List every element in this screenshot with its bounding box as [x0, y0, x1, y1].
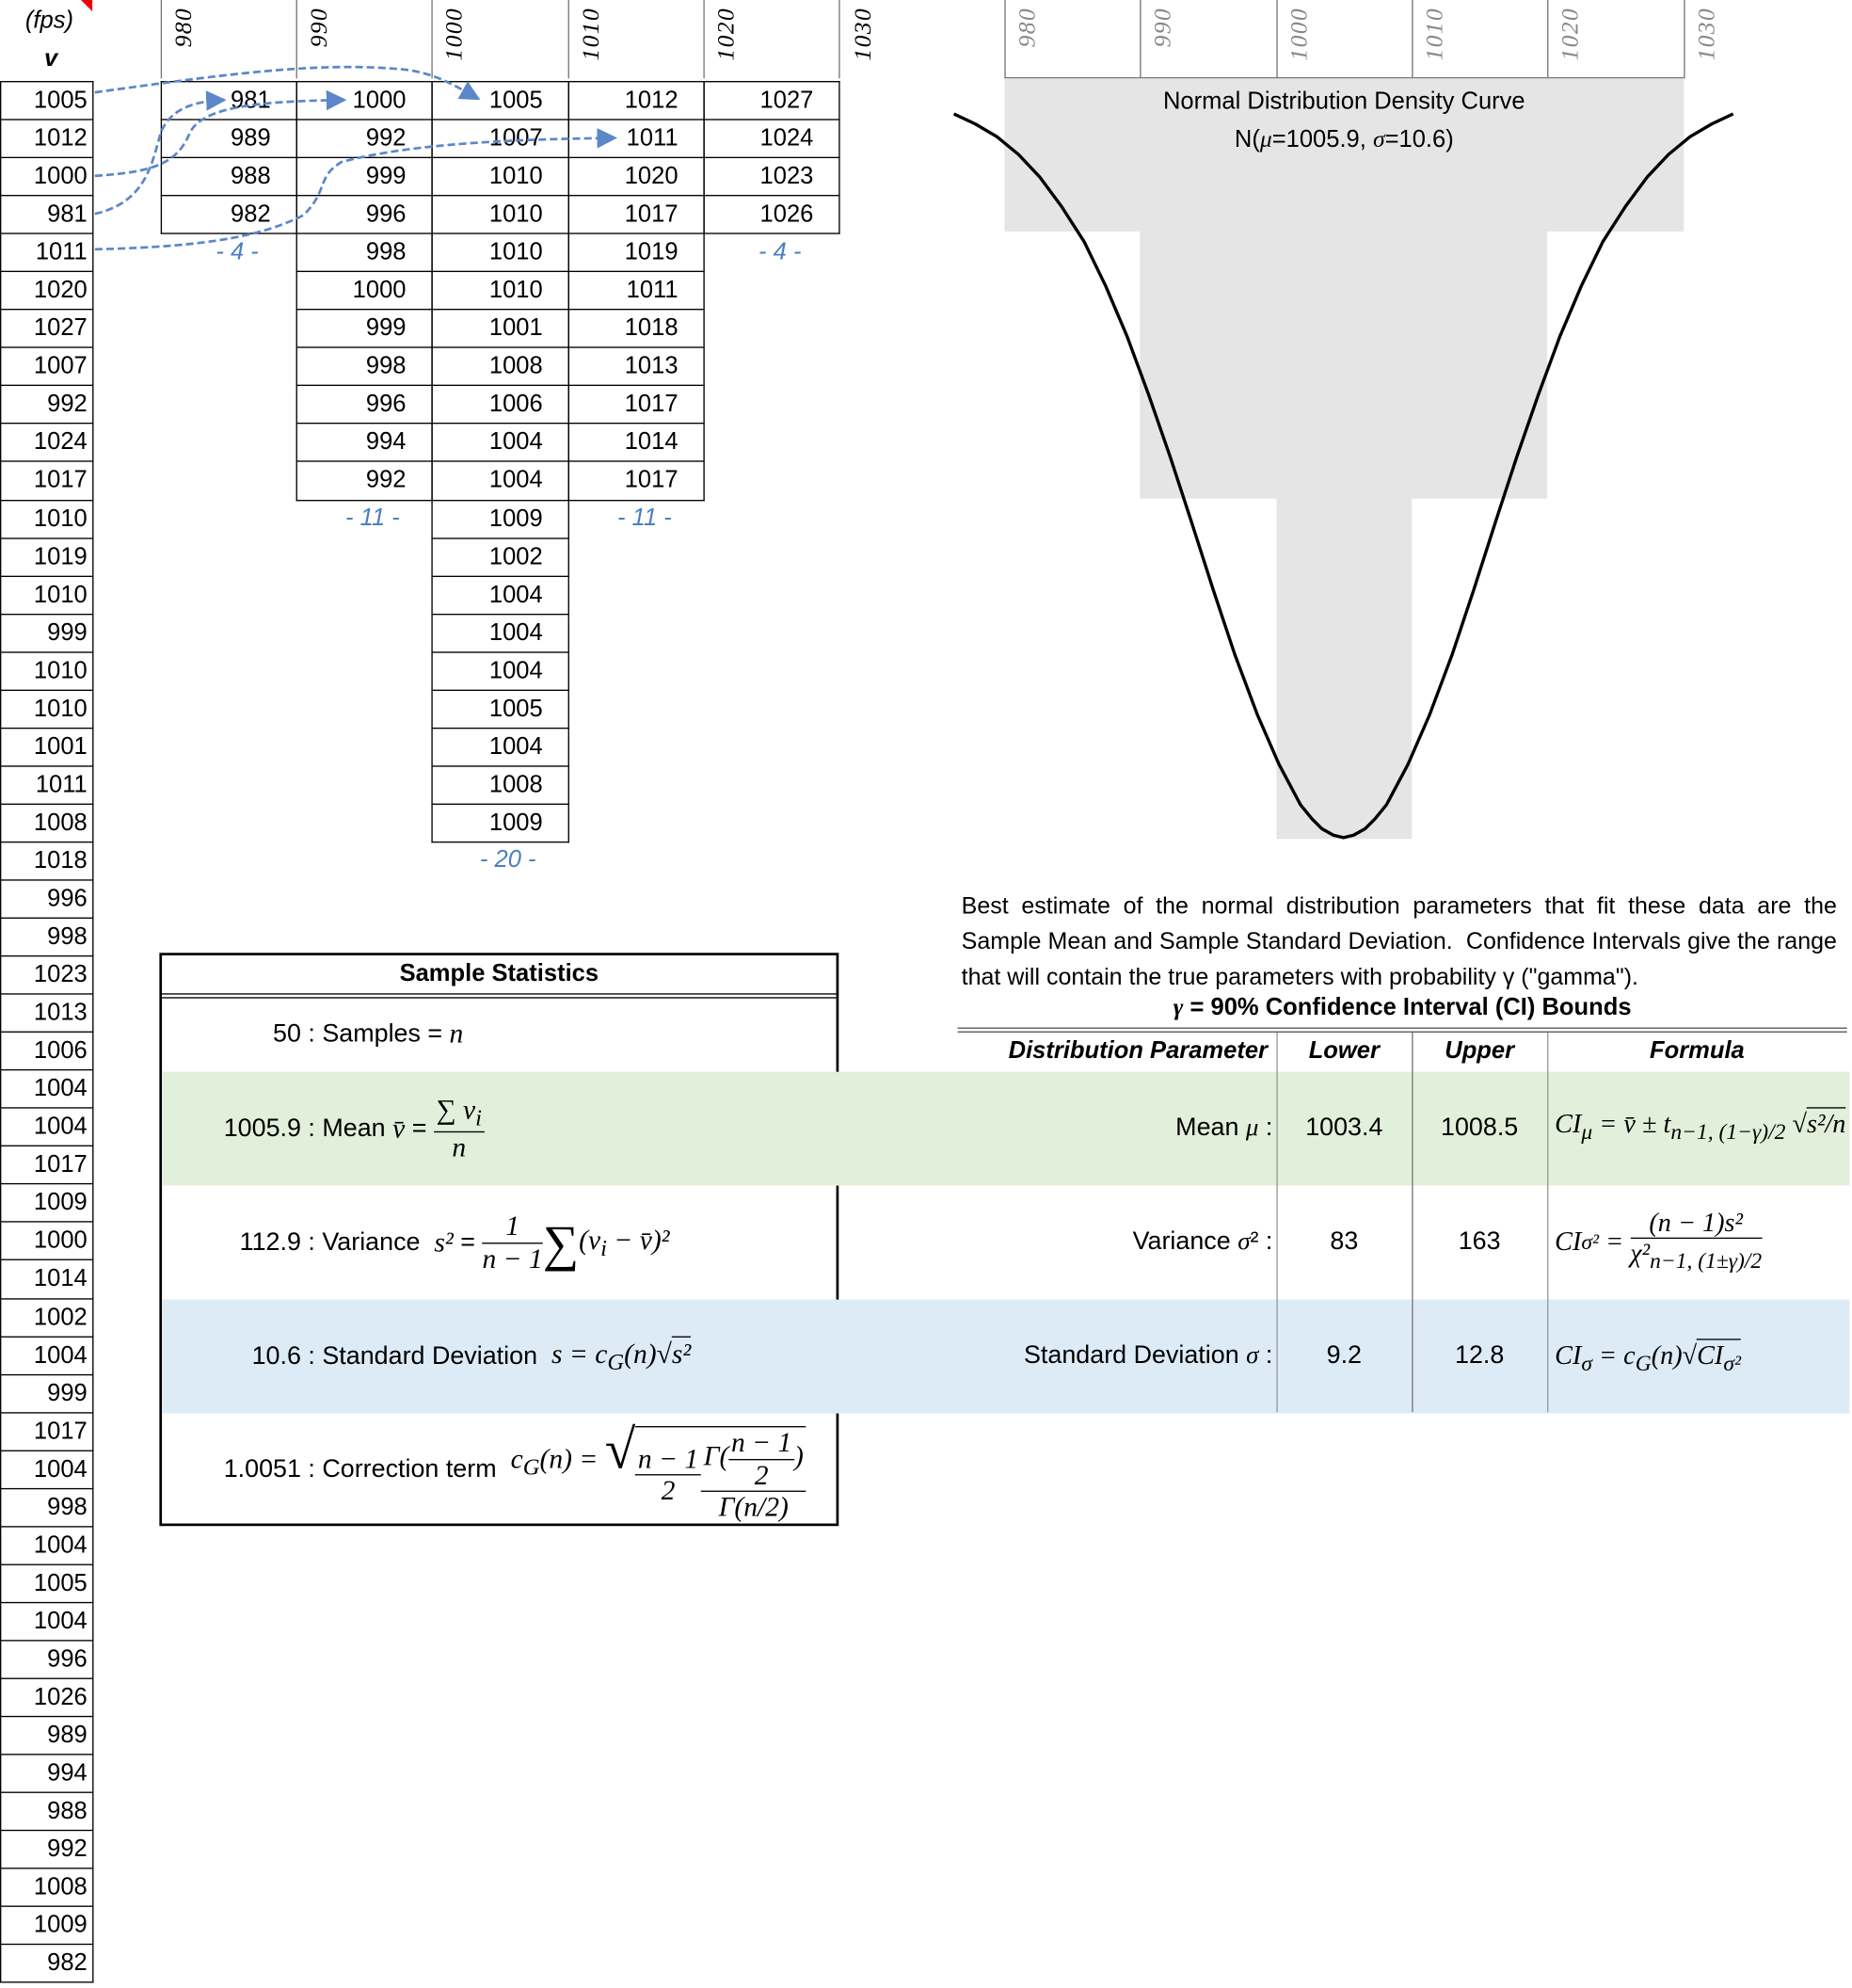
bin 990 column: 999 — [366, 315, 407, 342]
bin 1020 column: 1026 — [760, 201, 813, 228]
row: variance: s² — [434, 1226, 454, 1258]
v data column: 994 — [47, 1760, 88, 1787]
v data column: 992 — [47, 1836, 88, 1863]
count 1010: - 11 - — [617, 505, 672, 532]
heading: confidence interval bounds: γ = 90% Confidence Interval (CI) Bounds — [1173, 995, 1632, 1021]
v data column: 1004 — [34, 1114, 88, 1141]
dashed arrows — [94, 66, 617, 250]
header row — [1009, 1037, 1745, 1065]
row: variance: ∑ — [543, 1214, 579, 1271]
left histogram column headers: 1000 — [441, 8, 468, 61]
v data column: 981 — [47, 201, 88, 228]
right chart column headers: 1030 — [1694, 8, 1720, 61]
bin 1000 column: 1008 — [489, 354, 543, 380]
row: variance: 1 — [505, 1210, 519, 1242]
v data column: 989 — [47, 1723, 88, 1749]
header: v column: (fps) — [25, 8, 73, 34]
row: variance CI: σ² — [1581, 1228, 1599, 1254]
row: samples: 50 — [273, 1019, 301, 1047]
v data column: 1011 — [36, 772, 88, 798]
row: samples: : Samples = — [308, 1019, 442, 1047]
header row: Lower — [1309, 1037, 1380, 1065]
v data column: 1009 — [34, 1913, 88, 1939]
row: variance CI: χ²n−1, (1±γ)/2 — [1630, 1238, 1762, 1274]
chart title — [1163, 88, 1525, 153]
right chart column headers: 1020 — [1557, 8, 1584, 61]
v data column: 1013 — [34, 1000, 88, 1026]
bin 1010 column: 1011 — [627, 278, 679, 304]
right chart column headers — [1004, 0, 1720, 79]
left histogram column headers: 1030 — [850, 8, 877, 61]
bin 1010 column: 1018 — [625, 315, 679, 342]
row: mean: 1005.9 — [224, 1114, 301, 1142]
bin 1010 column: 1019 — [625, 239, 679, 266]
bin 1020 column: 1023 — [760, 164, 813, 190]
bin 1010 column: 1011 — [627, 125, 679, 152]
row: mean: ∑ vi — [437, 1094, 482, 1130]
v data column: 1004 — [34, 1608, 88, 1635]
bin 1000 column: 1004 — [489, 582, 543, 608]
row: variance — [240, 1210, 670, 1274]
v data column: 1018 — [34, 848, 88, 874]
v data column: 998 — [47, 1494, 88, 1521]
v data column: 1027 — [34, 315, 88, 342]
row: mean CI: CIμ = v̄ ± tn−1, (1−γ)/2 √s²/n — [1555, 1109, 1845, 1144]
row: standard deviation: 10.6 — [252, 1342, 301, 1370]
bin 980 column — [160, 81, 297, 234]
bin 990 column: 992 — [366, 468, 407, 494]
v data column: 982 — [47, 1950, 88, 1977]
header: v column: v — [44, 45, 57, 72]
row: correction term: cG(n) = √ — [511, 1419, 635, 1481]
panel: sample statistics — [159, 953, 838, 1526]
count 1020: - 4 - — [758, 239, 801, 265]
bin 1000 column: 1001 — [489, 315, 543, 342]
row: mean CI: 1008.5 — [1441, 1114, 1518, 1142]
header row: Formula — [1650, 1037, 1745, 1065]
v data column: 1010 — [34, 696, 88, 722]
v data column: 1012 — [34, 125, 88, 152]
bin 980 column: 982 — [231, 201, 271, 228]
v data column: 999 — [47, 1380, 88, 1406]
row: mean CI: Mean μ : — [1175, 1114, 1272, 1142]
right chart column headers: 990 — [1150, 8, 1176, 47]
row: mean CI: 1003.4 — [1305, 1114, 1382, 1142]
bin 990 column: 1000 — [353, 88, 407, 114]
v data column: 996 — [47, 886, 88, 912]
v data column: 1026 — [34, 1684, 88, 1710]
row: variance CI: (n − 1)s² — [1649, 1208, 1743, 1238]
v data column: 1014 — [34, 1266, 88, 1292]
bin 1010 column: 1017 — [625, 201, 679, 228]
bin 1000 column: 1006 — [489, 392, 543, 418]
right chart column headers: 980 — [1014, 8, 1041, 47]
row: samples — [273, 1018, 463, 1049]
row: correction term: 1.0051 — [224, 1455, 301, 1483]
count 990: - 11 - — [345, 505, 400, 532]
bin 1000 column: 1010 — [489, 201, 543, 228]
row: standard deviation: s = cG(n)√s² — [551, 1338, 691, 1374]
bin 1000 column: 1009 — [489, 810, 543, 836]
row: correction term: 2 — [755, 1458, 769, 1490]
bin 1000 column: 1009 — [489, 505, 543, 532]
bin 990 column: 998 — [366, 239, 407, 266]
bin 990 column: 999 — [366, 164, 407, 190]
left histogram column headers — [160, 0, 877, 79]
v data column: 1009 — [34, 1190, 88, 1216]
row: mean — [162, 1072, 1849, 1186]
row: variance: n − 1 — [482, 1242, 543, 1274]
v data column: 1010 — [34, 505, 88, 532]
v data column: 1019 — [34, 543, 88, 570]
v data column: 1008 — [34, 1874, 88, 1900]
v data column: 1000 — [34, 164, 88, 190]
bin 990 column: 994 — [366, 429, 407, 457]
row: variance CI: 163 — [1459, 1227, 1501, 1256]
bin 1000 column: 1004 — [489, 658, 543, 684]
v data column: 999 — [47, 619, 88, 646]
v data column: 1010 — [34, 658, 88, 684]
v data column: 1002 — [34, 1304, 88, 1331]
row: variance: 112.9 — [240, 1228, 301, 1256]
row: correction term: Γ(n/2) — [719, 1490, 789, 1522]
row: correction term: n − 1 — [731, 1427, 791, 1458]
header row: Upper — [1445, 1037, 1514, 1065]
bin 1000 column: 1010 — [489, 278, 543, 304]
row: variance CI: 83 — [1330, 1227, 1358, 1256]
bin 1000 column: 1002 — [489, 543, 543, 570]
row: correction term: 2 — [662, 1474, 675, 1506]
v data column: 1017 — [34, 468, 88, 494]
bin 980 column: 988 — [231, 164, 271, 190]
row: mean: : Mean = — [308, 1114, 426, 1142]
bin 980 column: 989 — [231, 125, 271, 152]
row: correction term: : Correction term — [308, 1455, 497, 1483]
v data column: 1004 — [34, 1342, 88, 1369]
row: samples: n — [450, 1018, 463, 1049]
bin 1000 column: 1004 — [489, 429, 543, 457]
bin 990 column: 996 — [366, 201, 407, 228]
heading: confidence interval bounds — [958, 995, 1847, 1033]
bin 1010 column — [568, 81, 705, 501]
v data column: 1005 — [34, 1570, 88, 1596]
bin 990 column: 996 — [366, 392, 407, 418]
right chart column headers: 1010 — [1422, 8, 1448, 61]
bin 1010 column: 1014 — [625, 429, 679, 457]
chart title: N(μ=1005.9, σ=10.6) — [1235, 126, 1454, 153]
bin 1000 column — [431, 81, 569, 843]
v data column: 1005 — [34, 88, 88, 114]
v data column: 1011 — [36, 239, 88, 266]
bin 980 column: 981 — [231, 88, 271, 114]
v data column: 1004 — [34, 1456, 88, 1483]
table: CI bounds — [1009, 1033, 1846, 1412]
v data column: 1024 — [34, 429, 88, 457]
left histogram column headers: 980 — [170, 8, 198, 47]
heading: sample statistics: Sample Statistics — [400, 960, 599, 987]
row: standard deviation: : Standard Deviation — [308, 1342, 537, 1370]
row: std dev CI — [1024, 1339, 1741, 1376]
v data column: 992 — [47, 392, 88, 418]
row: mean CI — [1175, 1107, 1846, 1144]
row: variance: : Variance = — [308, 1228, 475, 1256]
count 1000: - 20 - — [480, 846, 536, 874]
v data column: 1017 — [34, 1418, 88, 1445]
row: correction term — [224, 1419, 806, 1522]
bin 1000 column: 1004 — [489, 619, 543, 646]
v data column: 998 — [47, 923, 88, 951]
bin 990 column — [295, 81, 433, 501]
v data column — [0, 81, 94, 1983]
bin 1010 column: 1017 — [625, 468, 679, 494]
left histogram column headers: 1010 — [578, 8, 605, 61]
right chart column headers: 1000 — [1286, 8, 1313, 61]
row: correction term: Γ( ) — [704, 1440, 804, 1472]
heading: sample statistics — [162, 955, 837, 999]
row: variance CI: CI = — [1555, 1226, 1623, 1256]
bin 1000 column: 1005 — [489, 88, 543, 114]
left histogram column headers: 990 — [306, 8, 333, 47]
row: variance CI — [1133, 1208, 1763, 1274]
bin 1000 column: 1010 — [489, 164, 543, 190]
bin 1010 column: 1017 — [625, 392, 679, 418]
row: correction term: n − 1 — [638, 1443, 698, 1474]
v data column: 1017 — [34, 1152, 88, 1178]
row: std dev CI: Standard Deviation σ : — [1024, 1341, 1272, 1370]
v data column: 996 — [47, 1646, 88, 1673]
bin 1020 column: 1024 — [760, 125, 813, 152]
v data column: 1023 — [34, 962, 88, 988]
bin 1000 column: 1010 — [489, 239, 543, 266]
v data column: 1004 — [34, 1076, 88, 1102]
row: std dev CI: 12.8 — [1455, 1341, 1504, 1370]
v data column: 1000 — [34, 1228, 88, 1255]
chart: histogram bars and density curve — [952, 78, 1733, 840]
chart title: Normal Distribution Density Curve — [1163, 88, 1525, 115]
v data column: 1006 — [34, 1038, 88, 1065]
v data column: 1007 — [34, 354, 88, 380]
row: standard deviation — [162, 1300, 1849, 1414]
row: std dev CI: CIσ = cG(n)√CIσ² — [1555, 1340, 1741, 1376]
bin 1010 column: 1013 — [625, 354, 679, 380]
bin 1020 column: 1027 — [760, 88, 813, 114]
count 980: - 4 - — [216, 239, 259, 265]
v data column: 988 — [47, 1798, 88, 1825]
row: variance: (vi − v̄)² — [579, 1224, 670, 1260]
bin 1010 column: 1020 — [625, 164, 679, 190]
row: variance CI: Variance σ² : — [1133, 1227, 1272, 1256]
v data column: 1001 — [34, 733, 88, 761]
bin 1000 column: 1007 — [489, 125, 543, 152]
v data column: 1010 — [34, 582, 88, 608]
bin 990 column: 992 — [366, 125, 407, 152]
v data column: 1008 — [34, 810, 88, 836]
text block: explanation: Best estimate of the normal distribution parameters that fit these data are the Sample Mean and Sample Standard Deviation. Confidence Intervals give the range that will contain the true parameters with probability γ ("gamma"). — [962, 892, 1837, 989]
bin 1000 column: 1004 — [489, 468, 543, 494]
bin 1000 column: 1008 — [489, 772, 543, 798]
bin 990 column: 998 — [366, 354, 407, 380]
row: mean: v̄ — [392, 1113, 405, 1144]
bin 1010 column: 1012 — [625, 88, 679, 114]
bin 1000 column: 1004 — [489, 733, 543, 761]
v data column: 1020 — [34, 278, 88, 304]
row: mean: n — [452, 1130, 466, 1162]
bin 1020 column — [703, 81, 840, 234]
header row: Distribution Parameter — [1009, 1037, 1268, 1065]
bin 990 column: 1000 — [353, 278, 407, 304]
row: std dev CI: 9.2 — [1327, 1341, 1362, 1370]
header: v column — [25, 0, 92, 72]
left histogram column headers: 1020 — [713, 8, 740, 61]
bin 1000 column: 1005 — [489, 696, 543, 722]
v data column: 1004 — [34, 1532, 88, 1559]
